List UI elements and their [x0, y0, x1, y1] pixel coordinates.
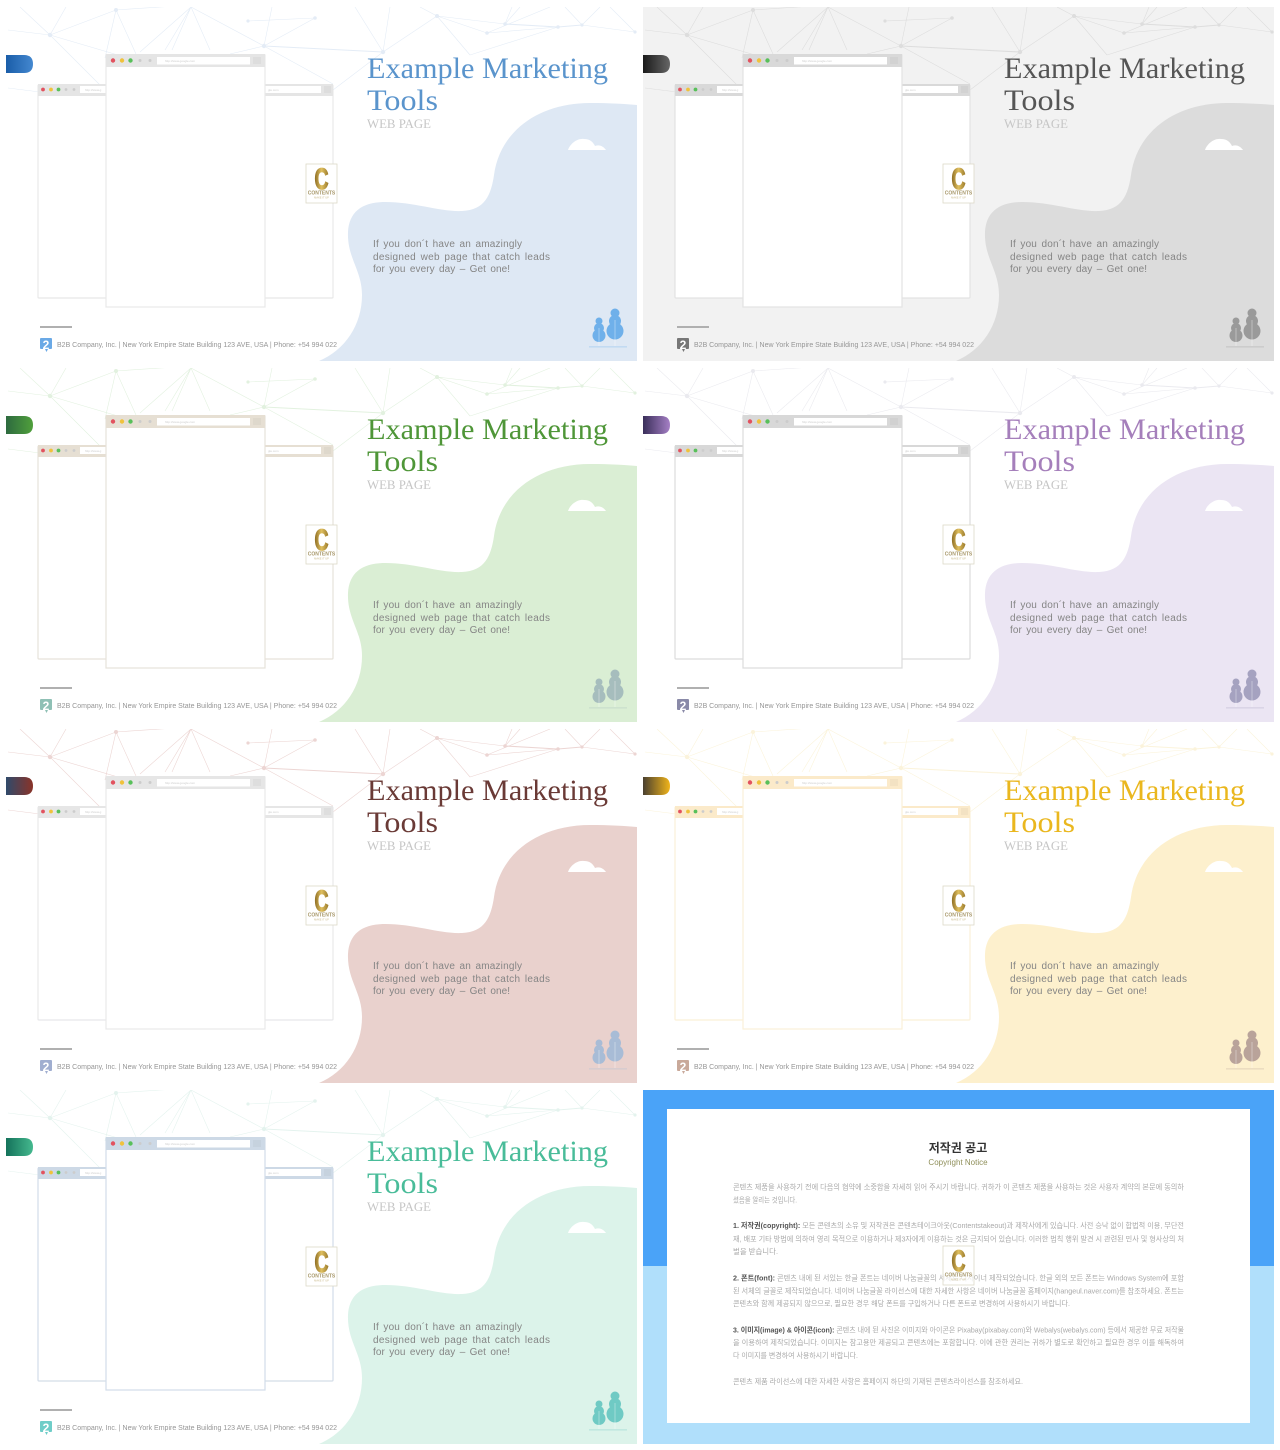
background bands [643, 1090, 1274, 1444]
title: Example Marketing [367, 774, 608, 807]
body text: designed web page that catch leads [373, 1335, 550, 1346]
icon: company logo: 2 [680, 699, 687, 713]
body text: for you every day – Get one! [1010, 986, 1147, 997]
logo badge: MAKE IT UP [951, 1278, 966, 1282]
body text: for you every day – Get one! [373, 986, 510, 997]
browser windows: gle.com [905, 88, 916, 92]
title: Example Marketing [367, 1135, 608, 1168]
blob shape [319, 103, 637, 361]
blob shape [956, 825, 1274, 1083]
cloud icon [1205, 861, 1243, 872]
logo badge: CONTENTS [945, 1272, 973, 1278]
footer text: B2B Company, Inc. | New York Empire State Building 123 AVE, USA | Phone: +54 994 022 [694, 1064, 974, 1071]
logo badge: C [952, 163, 966, 196]
tab marker [6, 1138, 33, 1156]
logo badge: C [314, 524, 328, 557]
body text [373, 960, 550, 997]
icon: company logo: 2 [680, 338, 687, 352]
logo badge: CONTENTS [945, 190, 973, 196]
icon: trees [1226, 670, 1264, 708]
logo badge: CONTENTS [308, 912, 336, 918]
cloud icon [568, 861, 606, 872]
tab marker [6, 55, 33, 73]
logo badge: C [314, 163, 328, 196]
subtitle: WEB PAGE [1004, 116, 1068, 131]
intro paragraph: 콘텐츠 제품을 사용하기 전에 다음의 협약에 소중함을 자세히 읽어 주시기 바랍니다. 귀하가 이 콘텐츠 제품을 사용하는 것은 사용자 계약의 본문에 동의하 [733, 1182, 1184, 1192]
font paragraph: 된 서체의 글꼴로 제작되었습니다. 네이버 나눔글꼴 라이선스에 대한 자세한 사항은 네이버 나눔글꼴 홈페이지(hangeul.naver.com)를 참조하세요. 폰트는 [733, 1286, 1184, 1296]
body text [1010, 238, 1187, 275]
icon: trees [1226, 308, 1264, 347]
panel: green slide [6, 368, 637, 722]
footer rule [40, 1048, 72, 1050]
network pattern [8, 366, 637, 453]
notice subheading: Copyright Notice [928, 1158, 988, 1167]
logo badge [306, 885, 337, 925]
icon: trees [1226, 1030, 1264, 1069]
title [1004, 52, 1245, 117]
title [1004, 774, 1245, 839]
title: Tools [1004, 445, 1075, 478]
browser windows [675, 776, 970, 1029]
tab marker [6, 416, 33, 434]
browser windows: http://www.g [722, 810, 739, 814]
subtitle: WEB PAGE [1004, 477, 1068, 492]
title [367, 774, 608, 839]
copyright paragraph: 1. 저작권(copyright): 모든 콘텐츠의 소유 및 저작권은 콘텐츠테이크아웃(Contentstakeout)과 제작사에게 있습니다. 사전 승낙 없이 합법적 이용, 무단전 [733, 1221, 1184, 1230]
icon: company logo: 2 [43, 338, 50, 352]
tab marker [643, 55, 670, 73]
body text: If you don´t have an amazingly [373, 238, 522, 250]
browser windows: http://www.google.com [802, 420, 833, 424]
logo badge [306, 524, 337, 564]
network pattern [8, 727, 637, 814]
title: Tools [1004, 806, 1075, 839]
logo badge: C [314, 1246, 328, 1279]
footer text: B2B Company, Inc. | New York Empire State Building 123 AVE, USA | Phone: +54 994 022 [57, 1064, 337, 1071]
closing note: 콘텐츠 제품 라이선스에 대한 자세한 사항은 홈페이지 하단의 기재된 콘텐츠라이선스를 참조하세요. [733, 1377, 1023, 1386]
icon: trees [589, 1030, 627, 1069]
logo badge [943, 163, 974, 203]
body text: designed web page that catch leads [373, 974, 550, 985]
footer text: B2B Company, Inc. | New York Empire State Building 123 AVE, USA | Phone: +54 994 022 [57, 342, 337, 349]
logo badge: CONTENTS [945, 912, 973, 918]
title: Tools [367, 84, 438, 117]
title: Tools [367, 1167, 438, 1200]
body text: designed web page that catch leads [1010, 613, 1187, 624]
body text: designed web page that catch leads [1010, 974, 1187, 985]
footer rule [677, 687, 709, 689]
title [1004, 413, 1245, 478]
body text: for you every day – Get one! [1010, 264, 1147, 275]
network pattern [645, 727, 1274, 814]
font paragraph: 콘텐츠와 함께 제공되지 않으므로, 필요한 경우 해당 폰트를 구입하거나 다른 폰트로 변경하여 사용하시기 바랍니다. [733, 1299, 1070, 1308]
footer text: B2B Company, Inc. | New York Empire State Building 123 AVE, USA | Phone: +54 994 022 [57, 703, 337, 710]
browser windows [675, 415, 970, 668]
subtitle: WEB PAGE [367, 116, 431, 131]
panel: purple slide [643, 368, 1274, 722]
title: Tools [1004, 84, 1075, 117]
browser windows: http://www.g [85, 810, 102, 814]
network pattern [645, 366, 1274, 453]
body text: designed web page that catch leads [373, 252, 550, 263]
body text [373, 599, 550, 636]
panel: yellow slide [643, 729, 1274, 1083]
title: Tools [367, 445, 438, 478]
image paragraph: 을 이용하여 제작되었습니다. 이미지는 참고용만 제공되고 콘텐츠에는 포함합니다. 이에 관한 권리는 귀하가 별도로 확인하고 필요한 경우 이를 해독하여 [733, 1338, 1184, 1347]
body text [373, 1321, 550, 1358]
network pattern [645, 5, 1274, 92]
subtitle: WEB PAGE [367, 838, 431, 853]
title: Example Marketing [1004, 52, 1245, 85]
blob shape [319, 1186, 637, 1444]
logo badge [943, 885, 974, 925]
icon: company logo [40, 699, 52, 713]
body text: designed web page that catch leads [1010, 252, 1187, 263]
logo badge: MAKE IT UP [314, 1278, 329, 1282]
copyright paragraph: 재, 배포 기타 방법에 의하여 영리 목적으로 이용하거나 제3자에게 이용하는 것은 금지되어 있습니다. 이러한 법칙 행위 발견 시 관련된 민사 및 형사상의 처 [733, 1234, 1184, 1244]
icon: company logo: 2 [43, 699, 50, 713]
footer text: B2B Company, Inc. | New York Empire State Building 123 AVE, USA | Phone: +54 994 022 [694, 703, 974, 710]
logo badge [943, 524, 974, 564]
panel: gray slide [643, 7, 1274, 361]
browser windows: gle.com [905, 810, 916, 814]
logo badge [943, 1245, 974, 1285]
browser windows: http://www.g [722, 449, 739, 453]
panel: copyright notice [643, 1090, 1274, 1444]
icon: company logo [677, 338, 689, 352]
logo badge: MAKE IT UP [951, 556, 966, 560]
browser windows: gle.com [268, 449, 279, 453]
body text: for you every day – Get one! [373, 1347, 510, 1358]
network pattern [8, 5, 637, 92]
cloud icon [568, 139, 606, 150]
logo badge: CONTENTS [308, 1274, 336, 1280]
cloud icon [568, 1222, 606, 1233]
logo badge [306, 1246, 337, 1286]
subtitle: WEB PAGE [1004, 838, 1068, 853]
body text: If you don´t have an amazingly [1010, 238, 1159, 250]
icon: company logo [677, 699, 689, 713]
footer rule [40, 1409, 72, 1411]
body text: for you every day – Get one! [1010, 625, 1147, 636]
browser windows: gle.com [268, 810, 279, 814]
browser windows [675, 54, 970, 307]
logo badge: C [952, 1245, 966, 1278]
footer rule [40, 326, 72, 328]
image paragraph: 3. 이미지(image) & 아이콘(icon): 콘텐츠 내에 된 사진은 이미지와 아이콘은 Pixabay(pixabay.com)와 Webalys(webalys.com) 등에서 제공한 무료 저작물 [733, 1326, 1184, 1334]
cloud icon [1205, 500, 1243, 511]
body text: If you don´t have an amazingly [373, 599, 522, 611]
copyright paragraph [733, 1221, 1184, 1256]
icon: company logo [677, 1060, 689, 1074]
logo badge: MAKE IT UP [314, 918, 329, 922]
panel: red slide [6, 729, 637, 1083]
footer text: B2B Company, Inc. | New York Empire State Building 123 AVE, USA | Phone: +54 994 022 [57, 1425, 337, 1432]
tab marker [6, 777, 33, 795]
logo badge: CONTENTS [308, 190, 336, 196]
icon: trees [589, 308, 627, 347]
body text: designed web page that catch leads [373, 613, 550, 624]
browser windows: http://www.g [722, 88, 739, 92]
title: Example Marketing [1004, 413, 1245, 446]
network pattern [8, 1088, 637, 1175]
body text: If you don´t have an amazingly [1010, 960, 1159, 972]
notice heading: 저작권 공고 [929, 1140, 987, 1155]
icon: company logo [40, 338, 52, 352]
logo badge: MAKE IT UP [951, 918, 966, 922]
title: Example Marketing [1004, 774, 1245, 807]
footer text: B2B Company, Inc. | New York Empire State Building 123 AVE, USA | Phone: +54 994 022 [694, 342, 974, 349]
footer rule [40, 687, 72, 689]
image paragraph [733, 1326, 1184, 1360]
font paragraph [733, 1274, 1184, 1308]
tab marker [643, 416, 670, 434]
browser windows: http://www.google.com [165, 1142, 196, 1146]
copyright paragraph: 벌을 받습니다. [733, 1247, 778, 1256]
body text: If you don´t have an amazingly [373, 960, 522, 972]
body text: If you don´t have an amazingly [1010, 599, 1159, 611]
body text: for you every day – Get one! [373, 625, 510, 636]
logo badge: CONTENTS [308, 552, 336, 558]
logo badge: C [952, 524, 966, 557]
logo badge: MAKE IT UP [951, 196, 966, 200]
browser windows: http://www.google.com [165, 420, 196, 424]
title [367, 52, 608, 117]
title [367, 1135, 608, 1200]
subtitle: WEB PAGE [367, 1199, 431, 1214]
icon: company logo [40, 1421, 52, 1435]
browser windows: gle.com [905, 449, 916, 453]
icon: trees [589, 670, 627, 708]
logo badge: MAKE IT UP [314, 196, 329, 200]
browser windows: gle.com [268, 88, 279, 92]
icon: company logo: 2 [43, 1421, 50, 1435]
browser windows [38, 776, 333, 1029]
title: Example Marketing [367, 413, 608, 446]
image paragraph: 다 이미지를 변경하여 사용하시기 바랍니다. [733, 1351, 858, 1360]
icon: trees [589, 1392, 627, 1430]
blob shape [319, 464, 637, 722]
body text: If you don´t have an amazingly [373, 1321, 522, 1333]
tab marker [643, 777, 670, 795]
icon: company logo: 2 [43, 1060, 50, 1074]
cloud icon [1205, 139, 1243, 150]
logo badge: C [952, 885, 966, 918]
browser windows: http://www.google.com [165, 59, 196, 63]
browser windows: http://www.g [85, 1171, 102, 1175]
icon: company logo: 2 [680, 1060, 687, 1074]
browser windows: gle.com [268, 1171, 279, 1175]
browser windows: http://www.g [85, 449, 102, 453]
logo badge: MAKE IT UP [314, 556, 329, 560]
white card [667, 1109, 1250, 1423]
title [367, 413, 608, 478]
icon: company logo [40, 1060, 52, 1074]
browser windows [38, 1137, 333, 1390]
blob shape [956, 464, 1274, 722]
intro paragraph: 셨음을 알리는 것입니다. [733, 1196, 797, 1204]
browser windows: http://www.google.com [802, 781, 833, 785]
logo badge: CONTENTS [945, 552, 973, 558]
panel: teal slide [6, 1090, 637, 1444]
footer rule [677, 1048, 709, 1050]
body text: for you every day – Get one! [373, 264, 510, 275]
browser windows [38, 415, 333, 668]
subtitle: WEB PAGE [367, 477, 431, 492]
logo badge [306, 163, 337, 203]
intro paragraph [733, 1182, 1184, 1204]
title: Example Marketing [367, 52, 608, 85]
font paragraph: 2. 폰트(font): 콘텐츠 내에 된 서있는 한글 폰트는 네이버 나눔글꼴의 서체로 디자이너 제작되었습니다. 한글 외의 모든 폰트는 Windows System에 포함 [733, 1274, 1184, 1282]
browser windows [38, 54, 333, 307]
blob shape [956, 103, 1274, 361]
logo badge: C [314, 885, 328, 918]
title: Tools [367, 806, 438, 839]
cloud icon [568, 500, 606, 511]
body text [1010, 960, 1187, 997]
panel: blue slide [6, 7, 637, 361]
body text [373, 238, 550, 275]
footer rule [677, 326, 709, 328]
browser windows: http://www.g [85, 88, 102, 92]
browser windows: http://www.google.com [802, 59, 833, 63]
body text [1010, 599, 1187, 636]
browser windows: http://www.google.com [165, 781, 196, 785]
blob shape [319, 825, 637, 1083]
